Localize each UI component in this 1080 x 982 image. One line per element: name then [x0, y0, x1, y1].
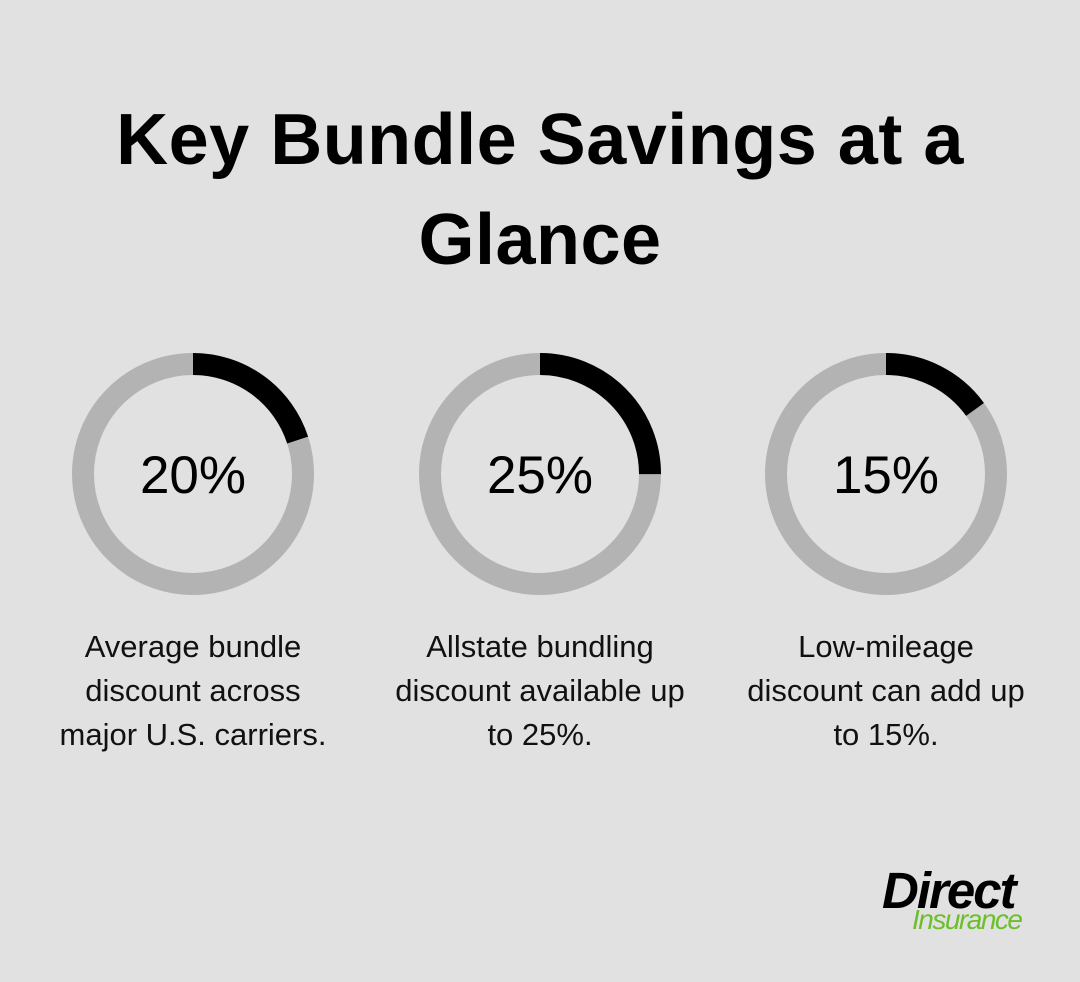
logo: Direct: [882, 862, 1015, 919]
donut: 15%: [776, 364, 996, 584]
caption 2: [395, 629, 685, 752]
donut: 20%: 20%: [140, 446, 246, 505]
caption 1: Average bundle: [85, 629, 301, 664]
caption 2: to 25%.: [487, 717, 593, 752]
caption 2: discount available up: [395, 673, 685, 708]
caption 2: Allstate bundling: [426, 629, 654, 664]
caption 3: [747, 629, 1025, 752]
donut: 25%: 25%: [487, 446, 593, 505]
title: Glance: [418, 200, 662, 280]
donut: 25%: [430, 364, 650, 584]
donut: 15%: 15%: [833, 446, 939, 505]
caption 3: to 15%.: [833, 717, 939, 752]
caption 1: discount across: [85, 673, 301, 708]
donut: 20%: [83, 364, 303, 584]
caption 3: Low-mileage: [798, 629, 974, 664]
caption 1: [60, 629, 326, 752]
caption 1: major U.S. carriers.: [60, 717, 326, 752]
title: [116, 100, 964, 280]
logo: Insurance: [912, 904, 1021, 935]
caption 3: discount can add up: [747, 673, 1025, 708]
title: Key Bundle Savings at a: [116, 100, 964, 180]
